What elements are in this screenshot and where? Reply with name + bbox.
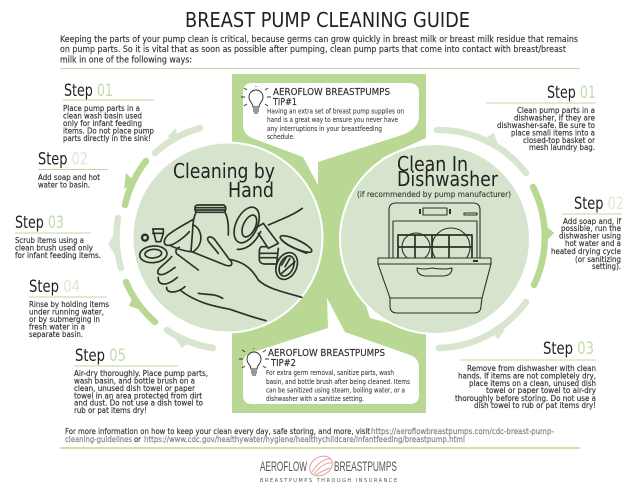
intro text: on pump parts. So it is vital that as soon as possible after pumping, clean pump parts that come into contact with breast/breast bbox=[60, 45, 566, 55]
right step 02: heated drying cycle bbox=[551, 247, 621, 256]
left step 05: clean, unused dish towel or paper bbox=[74, 384, 196, 393]
left step 04 bbox=[29, 277, 109, 339]
left step 01: only for infant feeding bbox=[63, 119, 142, 128]
right step 02: hot water and a bbox=[565, 239, 621, 248]
left step 05: rub or pat items dry! bbox=[74, 406, 147, 415]
logo: Aeroflow Breastpumps bbox=[260, 452, 397, 484]
right ring arcs bbox=[437, 130, 552, 348]
right step 02: possible, run the bbox=[561, 224, 621, 233]
left step 04: fresh water in a bbox=[29, 322, 85, 332]
logo: Aeroflow Breastpumps: BREASTPUMPS THROUGH INSURANCE bbox=[260, 478, 397, 484]
left step 05: wash basin, and bottle brush on a bbox=[74, 376, 195, 386]
tip 2 text: For extra germ removal, sanitize parts, wash bbox=[266, 369, 394, 377]
right step 03: hands. If items are not completely dry, bbox=[458, 372, 596, 380]
right step 03: Remove from dishwasher with clean bbox=[467, 364, 596, 373]
left step 03: Scrub items using a bbox=[15, 236, 84, 245]
right step 01: place small items into a bbox=[511, 128, 595, 138]
right step 01 bbox=[486, 83, 596, 152]
tip 2 icon: light bulb bbox=[239, 348, 269, 375]
panel: dishwasher circle bbox=[340, 144, 530, 334]
left ring arcs bbox=[110, 128, 213, 348]
footer text: https://aeroflowbreastpumps.com/cdc-breast-pump- bbox=[371, 427, 554, 436]
heading: clean in dishwasher: (if recommended by pump manufacturer) bbox=[357, 189, 511, 199]
left step 04: or by submerging in bbox=[29, 315, 100, 324]
heading: clean in dishwasher: Dishwasher bbox=[397, 167, 498, 191]
right step 01: dishwasher-safe. Be sure to bbox=[497, 121, 595, 130]
logo: Aeroflow Breastpumps: BREASTPUMPS bbox=[334, 458, 397, 474]
left step 02: water to basin. bbox=[38, 180, 90, 190]
left step 01: parts directly in the sink! bbox=[63, 134, 151, 143]
right step 01: mesh laundry bag. bbox=[529, 143, 595, 152]
right step 02: Step 02 bbox=[574, 194, 624, 213]
footer text bbox=[65, 427, 554, 444]
tip 1 text: Having an extra set of breast pump supplies on bbox=[267, 108, 404, 116]
right step 03: thoroughly before storing. Do not use a bbox=[455, 394, 596, 403]
left step 04: separate basin. bbox=[29, 330, 83, 339]
right step 02: Add soap and, if bbox=[563, 217, 621, 226]
tip 2 bubble bbox=[243, 298, 419, 404]
left step 03: Step 03 bbox=[15, 213, 64, 232]
right step 01: Clean pump parts in a bbox=[517, 106, 595, 115]
left step 03: clean brush used only bbox=[15, 244, 93, 252]
tip 1 bubble bbox=[243, 83, 419, 185]
illustration: hands holding pump parts bbox=[139, 203, 314, 321]
left step 02: Step 02 bbox=[38, 150, 88, 168]
left step 05: towel in an area protected from dirt bbox=[74, 392, 202, 400]
right step 03: dish towel to rub or pat items dry! bbox=[474, 401, 596, 410]
tip 1 icon: light bulb bbox=[241, 86, 271, 113]
footer text: cleaning-guidelines bbox=[65, 435, 132, 444]
right step 02: (or sanitizing bbox=[575, 255, 621, 264]
tip 2 text: AEROFLOW BREASTPUMPS bbox=[268, 348, 385, 359]
left step 01 bbox=[63, 81, 154, 143]
heading: cleaning by hand: Hand bbox=[228, 178, 274, 202]
tip 1 text: hand is a great way to ensure you never have bbox=[267, 116, 398, 124]
right step 02: dishwasher using bbox=[559, 232, 621, 240]
left step 04: Rinse by holding items bbox=[29, 300, 109, 309]
left step 01: Place pump parts in a bbox=[63, 104, 140, 113]
left step 03: for infant feeding items. bbox=[15, 251, 101, 260]
right step 02 bbox=[551, 194, 624, 271]
tip 1 text: any interruptions in your breastfeeding bbox=[267, 125, 382, 133]
tip 2 text: can be sanitized using steam, boiling water, or a bbox=[266, 386, 405, 394]
heading: clean in dishwasher bbox=[357, 152, 511, 199]
intro text: milk in one of the following ways: bbox=[60, 56, 192, 66]
left step 05: Air-dry thoroughly. Place pump parts, bbox=[74, 369, 208, 378]
right step 01: closed-top basket or bbox=[523, 136, 596, 145]
left step 05: Step 05 bbox=[75, 346, 126, 365]
tip 2 text: dishwasher with a sanitize setting. bbox=[266, 395, 364, 403]
logo: Aeroflow Breastpumps: AEROFLOW bbox=[260, 458, 307, 474]
tip 1 text: schedule. bbox=[267, 133, 295, 141]
heading: cleaning by hand: Cleaning by bbox=[173, 159, 275, 183]
left step 05 bbox=[74, 346, 208, 415]
footer text: https://www.cdc.gov/healthywater/hygiene/healthychildcare/infantfeeding/breastpump.html bbox=[144, 435, 465, 444]
footer text: or bbox=[134, 435, 142, 444]
right step 01: dishwasher, if they are bbox=[514, 114, 595, 122]
right step 03 bbox=[455, 339, 596, 410]
title: BREAST PUMP CLEANING GUIDE bbox=[185, 8, 470, 32]
left step 04: Step 04 bbox=[29, 277, 80, 296]
tip 1 text: TIP#1 bbox=[272, 97, 297, 108]
left step 01: Step 01 bbox=[64, 81, 113, 100]
green connector shape bbox=[232, 74, 426, 413]
tip 2 text: basin, and bottle brush after being cleaned. Items bbox=[266, 378, 410, 386]
right step 03: Step 03 bbox=[543, 339, 594, 358]
left step 01: clean wash basin used bbox=[63, 112, 142, 120]
left step 01: items. Do not place pump bbox=[63, 126, 154, 136]
left step 02 bbox=[38, 150, 108, 190]
tip 2 text bbox=[266, 348, 410, 403]
tip 1 text bbox=[267, 87, 404, 141]
left step 05: and dust. Do not use a dish towel to bbox=[74, 398, 203, 408]
tip 1 text: AEROFLOW BREASTPUMPS bbox=[273, 87, 390, 98]
right step 03: place items on a clean, unused dish bbox=[469, 379, 596, 388]
left step 04: under running water, bbox=[29, 308, 104, 316]
right step 02: setting). bbox=[592, 262, 621, 271]
tip 2 text: TIP#2 bbox=[270, 358, 296, 369]
illustration: dishwasher bbox=[378, 203, 491, 313]
left step 02: Add soap and hot bbox=[38, 173, 100, 182]
left step 03 bbox=[15, 213, 101, 260]
panel: cleaning by hand circle bbox=[132, 142, 322, 332]
intro text bbox=[60, 35, 578, 66]
right step 01: Step 01 bbox=[547, 83, 596, 102]
heading: cleaning by hand bbox=[173, 159, 275, 202]
heading: clean in dishwasher: Clean In bbox=[397, 152, 468, 176]
right step 03: towel or paper towel to air-dry bbox=[486, 386, 596, 395]
footer text: For more information on how to keep your clean every day, safe storing, and more, visit bbox=[65, 427, 370, 436]
